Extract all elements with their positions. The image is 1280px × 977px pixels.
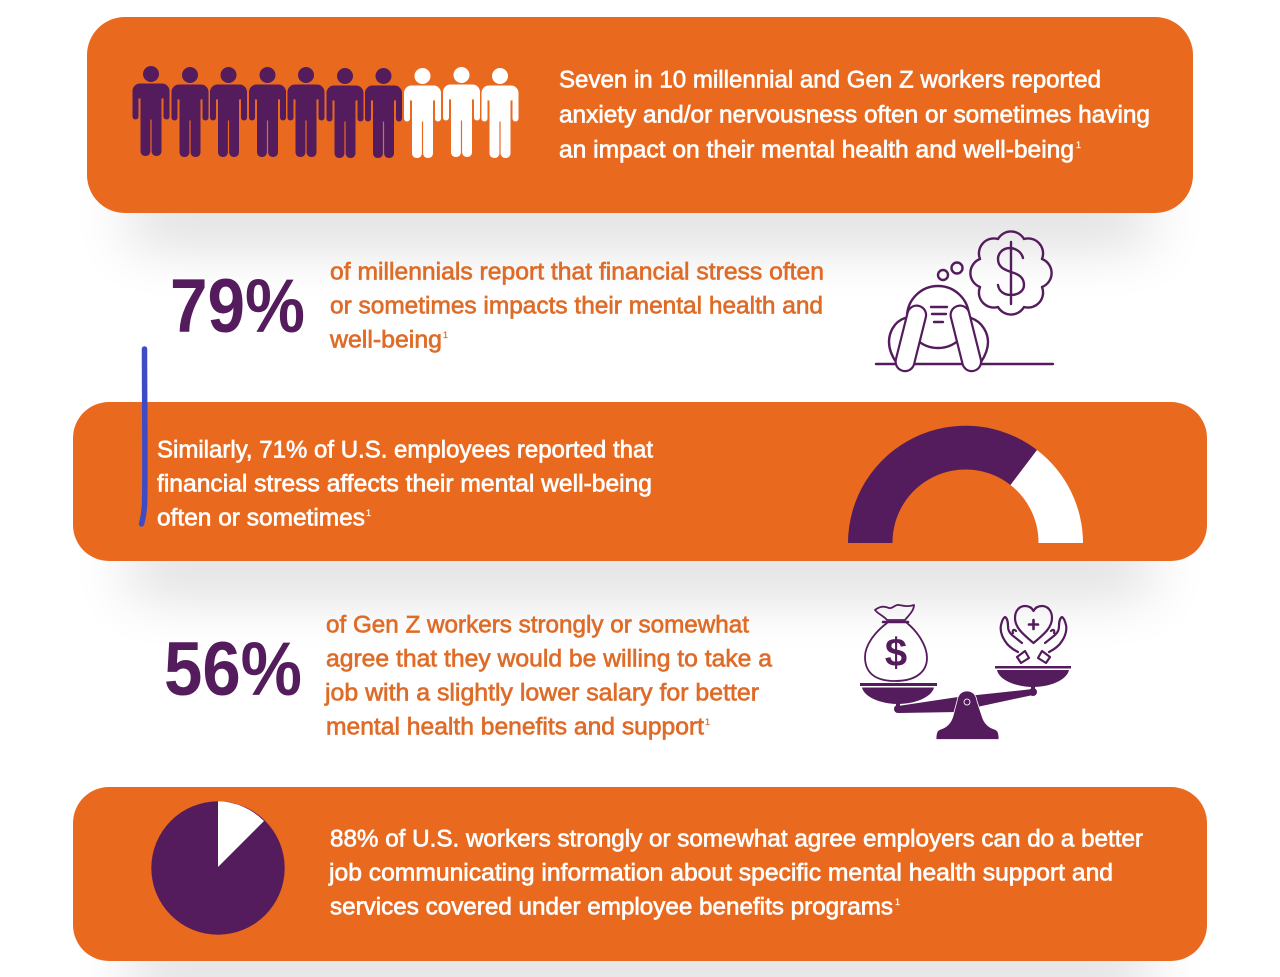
text: 79% description: or sometimes impacts their mental health and [330, 292, 823, 320]
text: 88% description: 88% of U.S. workers strongly or somewhat agree employers can do a better [330, 826, 1143, 852]
icon: scale balancing money and health: $ [885, 631, 907, 675]
text: seven in 10: anxiety and/or nervousness often or sometimes having [559, 102, 1150, 128]
text: 56% description: of Gen Z workers strongly or somewhat [326, 612, 749, 638]
panel background [73, 402, 1207, 561]
money bag [865, 623, 927, 681]
heart with cross and hands [1015, 606, 1052, 643]
number: 79%: 79% [170, 264, 305, 349]
text: 79% description [329, 258, 824, 354]
chart: 71% gauge [848, 426, 1083, 543]
text: 79% description: 1 [443, 330, 448, 340]
text: 88% description: services covered under employee benefits programs [330, 894, 893, 920]
number: 56%: 56% [164, 627, 302, 712]
text: 79% description: of millennials report that financial stress often [330, 258, 824, 286]
stat: 56% of Gen Z workers [164, 605, 1071, 740]
panel: 88% of U.S. workers [73, 787, 1207, 961]
text: 56% description [324, 612, 773, 740]
chart: 88% pie [151, 801, 285, 935]
text: 79% description: well-being [329, 326, 442, 354]
icon: row of ten people, seven highlighted [132, 66, 518, 158]
icon: worried person thinking about money [876, 231, 1053, 364]
icon: scale balancing money and health [860, 605, 1071, 740]
text: 88% description [328, 826, 1143, 920]
text: seven in 10 [559, 66, 1150, 164]
text: 56% description: 1 [705, 717, 710, 727]
text: 56% description: mental health benefits and support [326, 714, 704, 740]
text: seven in 10: an impact on their mental health and well-being [559, 136, 1074, 164]
panel background [73, 787, 1207, 961]
text: seven in 10: 1 [1076, 140, 1081, 150]
panel: 71% of U.S. employees [73, 402, 1207, 561]
stat: 79% of millennials [170, 231, 1053, 364]
annotation: blue vertical pen stroke [142, 349, 145, 524]
text: 71% description [157, 436, 653, 532]
text: 88% description: 1 [895, 897, 900, 907]
right pan [995, 666, 1071, 687]
text: 56% description: job with a slightly lower salary for better [324, 680, 759, 706]
left pan [860, 683, 937, 704]
text: 71% description: financial stress affects their mental well-being [157, 470, 652, 498]
text: 71% description: 1 [366, 508, 371, 518]
panel background [87, 17, 1193, 213]
panel: seven in 10 workers [87, 17, 1193, 213]
text: 71% description: Similarly, 71% of U.S. employees reported that [157, 436, 653, 464]
text: 56% description: agree that they would be willing to take a [326, 646, 773, 672]
beam and base [898, 689, 1033, 713]
text: 71% description: often or sometimes [157, 504, 365, 532]
text: 88% description: job communicating information about specific mental health support and [328, 860, 1113, 886]
text: seven in 10: Seven in 10 millennial and Gen Z workers reported [559, 66, 1101, 94]
